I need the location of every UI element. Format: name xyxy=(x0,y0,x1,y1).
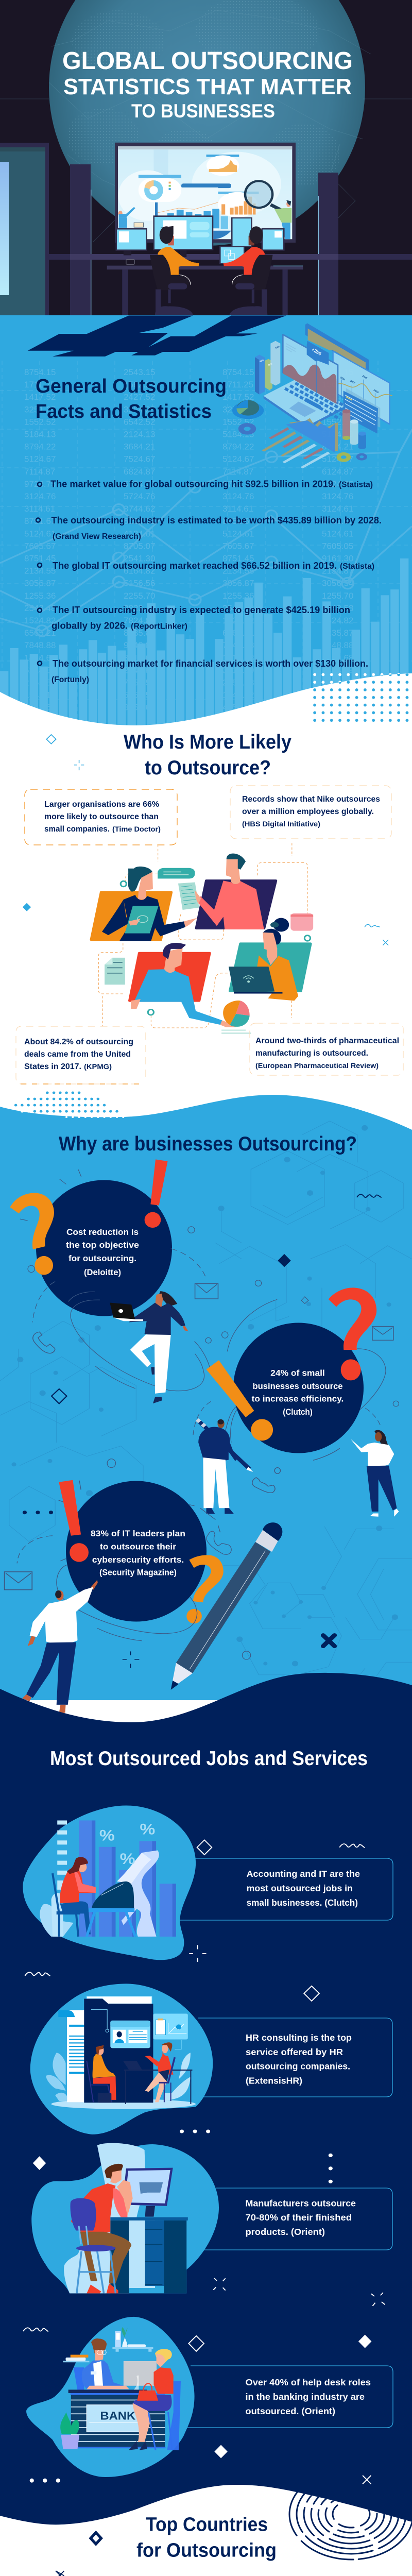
deco marks white section xyxy=(23,735,388,945)
grid numbers: 8751.67 xyxy=(24,516,56,526)
heading: why are businesses outsourcing: Why are businesses Outsourcing? xyxy=(59,1133,357,1155)
stat box: Nike: Records show that Nike outsources xyxy=(242,795,380,804)
grid numbers: 2155.58 xyxy=(24,678,56,687)
job card 2: HR xyxy=(30,1984,392,2183)
grid numbers: 8794.22 xyxy=(24,442,56,452)
grid numbers: 6824.87 xyxy=(124,467,155,477)
back panel xyxy=(305,323,369,372)
icon: giant pencil xyxy=(171,1522,282,1690)
illustration: accountant: % xyxy=(120,1850,135,1867)
heading: who is more likely: to Outsource? xyxy=(145,757,271,779)
wall screen with charts xyxy=(115,143,296,243)
timeline panel xyxy=(333,351,392,424)
hero section: control room xyxy=(0,0,412,315)
heading: top countries: Top Countries xyxy=(146,2514,268,2536)
why section blue background xyxy=(0,1095,412,1700)
callout box: Over 40% of help desk roles xyxy=(245,2377,371,2387)
grid numbers: 1524.52 xyxy=(322,392,353,402)
main title: STATISTICS THAT MATTER xyxy=(63,74,352,99)
grid numbers: 7605.05 xyxy=(322,541,353,551)
grid numbers: 1235.87 xyxy=(322,628,353,638)
illustration: accountant: % xyxy=(140,1820,155,1838)
grid numbers xyxy=(24,367,353,713)
job card 1: accounting xyxy=(23,1805,393,1976)
heading: top countries xyxy=(136,2514,277,2562)
bars: 56% xyxy=(259,359,264,363)
lines and small marks xyxy=(17,1459,251,1659)
grid numbers: 8751.67 xyxy=(222,516,254,526)
floor shadows of operators xyxy=(28,315,286,357)
fact: industry worth: The outsourcing industry is estimated to be worth $435.89 billion by 2028. xyxy=(52,515,382,526)
grid numbers: 7114.87 xyxy=(24,467,55,477)
grid numbers: 1255.36 xyxy=(24,591,56,601)
navy section background xyxy=(0,1673,412,2530)
callout box: outsourced. (Orient) xyxy=(245,2406,335,2416)
icon: orange question xyxy=(186,1555,224,1623)
stat circle 1: cost reduction: the top objective xyxy=(66,1240,139,1250)
connectors xyxy=(98,843,307,1028)
grid numbers: 5156.56 xyxy=(124,579,155,588)
illustration: bank desk xyxy=(26,2317,195,2477)
grid numbers: 5214.89 xyxy=(24,665,56,675)
man in coral xyxy=(195,854,264,929)
stat circle 1: cost reduction xyxy=(36,1180,172,1316)
stat box: larger organisations: more likely to outsource than xyxy=(44,812,159,821)
icon: cross xyxy=(323,1635,334,1646)
callout box xyxy=(203,2188,392,2250)
page icon xyxy=(105,958,125,985)
man reaching up xyxy=(22,1580,98,1713)
stat box: larger organisations: Larger organisations are 66% xyxy=(44,800,159,809)
grid numbers: 1542.12 xyxy=(24,690,56,700)
grid numbers: 3251.25 xyxy=(322,404,353,414)
icon: red question xyxy=(329,1287,376,1380)
grid numbers: 7855.55 xyxy=(124,678,155,687)
grid numbers: 7824.82 xyxy=(124,616,155,625)
grid numbers: 5124.61 xyxy=(322,529,353,538)
grid numbers: 2543.48 xyxy=(24,603,56,613)
icon: magnifier xyxy=(245,181,281,210)
pie chart xyxy=(223,1001,250,1027)
icon: envelope right xyxy=(372,1327,393,1340)
callout box: (ExtensisHR) xyxy=(246,2076,302,2086)
bars xyxy=(255,341,280,395)
stat circle 3: IT leaders xyxy=(66,1481,207,1622)
grid numbers: 6164.82 xyxy=(124,566,155,576)
grid numbers: 3124.76 xyxy=(322,492,353,501)
grid numbers: 5124.61 xyxy=(222,529,254,538)
stripe chart xyxy=(262,427,330,468)
grid numbers: 1248.88 xyxy=(322,640,353,650)
grid numbers: 3254.25 xyxy=(124,404,155,414)
stat box: Nike xyxy=(230,786,391,839)
cylinders xyxy=(342,409,366,449)
stat box: KPMG: deals came from the United xyxy=(24,1050,131,1059)
grid numbers: 2134.87 xyxy=(322,566,353,576)
lower canvas: countries and footer xyxy=(56,2571,65,2576)
grid numbers: 1417.52 xyxy=(24,392,56,402)
grid numbers: 3684.21 xyxy=(124,442,155,452)
woman looking up xyxy=(351,1430,399,1517)
stat box: pharma xyxy=(250,1023,403,1075)
grid numbers: 2155.58 xyxy=(222,678,254,687)
grid numbers: 5184.13 xyxy=(24,430,56,439)
white wave with dots xyxy=(0,673,412,732)
grid numbers: 2134.55 xyxy=(24,566,56,576)
main title: TO BUSINESSES xyxy=(131,100,275,122)
stat box: larger organisations: small companies. xyxy=(44,825,110,834)
grid numbers: 1542.12 xyxy=(322,690,353,700)
grid numbers: 2427.52 xyxy=(124,392,155,402)
grid numbers: 1417.52 xyxy=(222,392,254,402)
operator in red xyxy=(224,226,273,315)
stat circle 1: cost reduction: (Deloitte) xyxy=(84,1267,121,1277)
job card 4: banking xyxy=(26,2317,393,2484)
grid numbers: 4558.69 xyxy=(24,703,56,713)
callout box: small businesses. (Clutch) xyxy=(247,1897,358,1908)
grid numbers: 6124.61 xyxy=(124,516,155,526)
stat circle 1: cost reduction: for outsourcing. xyxy=(68,1253,136,1263)
grid numbers: 2155.58 xyxy=(322,678,353,687)
grid numbers: 1524.82 xyxy=(322,616,353,625)
man in blue xyxy=(131,943,236,1027)
grid numbers: 2543.48 xyxy=(222,603,254,613)
bars: 74% xyxy=(275,345,280,349)
callout box: Accounting and IT are the xyxy=(247,1869,360,1879)
teal rings xyxy=(121,881,311,1015)
grid numbers: 2255.70 xyxy=(124,591,155,601)
man with pencil xyxy=(197,1419,253,1514)
grid numbers: 5124.61 xyxy=(24,529,56,538)
icon: envelope xyxy=(5,1572,32,1590)
grid numbers: 1414.89 xyxy=(322,665,353,675)
desk and monitors xyxy=(107,215,303,315)
bar chart backdrop xyxy=(0,558,408,740)
grid numbers: 1562.25 xyxy=(124,380,155,389)
grid numbers: 7848.88 xyxy=(222,640,254,650)
grid numbers: 5124.67 xyxy=(222,454,254,464)
illustration: HR consultation xyxy=(30,1984,213,2134)
line chart backdrop xyxy=(0,430,412,636)
isometric laptop dashboard illustration xyxy=(232,323,392,468)
timeline panel: 2018 xyxy=(362,375,368,380)
grid numbers: 9724.75 xyxy=(222,479,254,489)
grid numbers: 7605.67 xyxy=(222,541,254,551)
fact: IT revenue: (ReportLinker) xyxy=(131,622,187,631)
decor xyxy=(23,2278,385,2331)
stat box: pharma: manufacturing is outsourced. xyxy=(255,1049,368,1058)
icon: envelope xyxy=(195,1283,218,1299)
decor around third circle xyxy=(5,1459,334,1713)
timeline panel: 2019 xyxy=(373,389,379,394)
chart window xyxy=(283,334,338,404)
grid numbers: 4558.69 xyxy=(322,703,353,713)
analyst figure in green xyxy=(274,200,291,239)
grid numbers: 7605.67 xyxy=(24,541,56,551)
shapes decor xyxy=(52,1194,382,1404)
grid numbers: 2541.30 xyxy=(124,553,155,564)
grid numbers: 8835.84 xyxy=(124,628,155,638)
grid numbers: 3056.87 xyxy=(24,579,56,588)
grid numbers: 2134.55 xyxy=(222,566,254,576)
grid numbers: 8744.62 xyxy=(124,504,155,514)
stat box: KPMG xyxy=(16,1026,146,1084)
grid numbers: 3251.25 xyxy=(222,404,254,414)
timeline panel: 2016 xyxy=(339,376,346,381)
grid numbers: 3124.76 xyxy=(24,492,56,501)
grid numbers: 2344.89 xyxy=(124,665,155,675)
grid numbers: 3124.76 xyxy=(222,492,254,501)
stat circle 2: small businesses: (Clutch) xyxy=(283,1407,313,1417)
gears xyxy=(238,423,367,462)
grid numbers: 8751.45 xyxy=(24,553,56,564)
fact: industry worth: (Grand View Research) xyxy=(53,532,141,541)
fact: financial services xyxy=(38,658,368,684)
grid numbers: 1255.36 xyxy=(222,591,254,601)
heading: who is more likely: Who Is More Likely xyxy=(124,731,291,753)
icon: orange exclamation xyxy=(207,1360,273,1440)
pillars and rail xyxy=(49,164,412,315)
tag +256: +256 xyxy=(311,347,322,357)
panel: orange xyxy=(91,892,171,940)
stat circle 3: IT leaders: to outsource their xyxy=(100,1542,176,1552)
panel: red xyxy=(130,953,210,1001)
woman with laptop figure xyxy=(110,1291,188,1403)
grid numbers: 1552.52 xyxy=(24,417,56,427)
small data window xyxy=(344,388,380,434)
grid numbers: 8751.67 xyxy=(322,516,353,526)
grid numbers: 2543.15 xyxy=(124,367,155,377)
operator in orange xyxy=(150,226,199,315)
stat circle 2: small businesses xyxy=(233,1323,364,1453)
grid numbers: 1552.52 xyxy=(322,417,353,427)
grid numbers: 8794.22 xyxy=(222,442,254,452)
stat box: KPMG: About 84.2% of outsourcing xyxy=(24,1038,133,1046)
grid numbers: 6542.52 xyxy=(124,417,155,427)
grid numbers: 4124.61 xyxy=(124,529,155,538)
grid numbers: 8794.21 xyxy=(322,442,353,452)
grid numbers: 1524.82 xyxy=(24,616,56,625)
grid numbers: 3251.25 xyxy=(24,404,56,414)
callout box: products. (Orient) xyxy=(245,2227,325,2237)
grid numbers: 3458.60 xyxy=(124,703,155,713)
heading: top countries: for Outsourcing xyxy=(136,2540,277,2562)
wall panel left xyxy=(0,143,49,315)
grid numbers: 1542.12 xyxy=(222,690,254,700)
main title xyxy=(62,47,353,122)
grid numbers: 1562.25 xyxy=(322,380,353,389)
grid numbers: 5124.67 xyxy=(24,454,56,464)
grid numbers: 1524.82 xyxy=(222,616,254,625)
grid numbers: 6565.21 xyxy=(222,628,254,638)
grid numbers: 8705.07 xyxy=(124,541,155,551)
fact: financial services: The outsourcing market for financial services is worth over $130 billion. xyxy=(53,658,368,669)
grid numbers: 6565.21 xyxy=(24,628,56,638)
grid numbers: 1414.68 xyxy=(222,653,254,663)
heading: general outsourcing: General Outsourcing xyxy=(36,376,227,397)
illustration: designer at desk xyxy=(31,2143,219,2293)
stat box: Nike: (HBS Digital Initiative) xyxy=(242,820,320,828)
decor xyxy=(33,1986,333,2183)
laptop base xyxy=(264,379,347,429)
grid numbers: 4558.69 xyxy=(222,703,254,713)
fact: IT revenue: The IT outsourcing industry is expected to generate $425.19 billion xyxy=(53,604,350,615)
chat bubble xyxy=(158,868,195,878)
icon: fingerprint top right xyxy=(288,2492,412,2561)
grid numbers: 9724.75 xyxy=(322,479,353,489)
stat box: KPMG: (KPMG) xyxy=(84,1062,112,1071)
grid numbers: 9161.30 xyxy=(322,553,353,564)
heading: most outsourced: Most Outsourced Jobs and Services xyxy=(50,1748,368,1770)
panel: teal xyxy=(230,944,311,991)
analyst figure in blue xyxy=(118,207,144,228)
decor xyxy=(30,2335,371,2484)
stat box: Nike: over a million employees globally. xyxy=(242,807,374,816)
fact: global IT market: (Statista) xyxy=(340,562,374,571)
stat circle 3: IT leaders: cybersecurity efforts. xyxy=(92,1555,184,1565)
grid numbers: 5184.13 xyxy=(222,430,254,439)
grid numbers: 8751.45 xyxy=(222,553,254,564)
deco marks xyxy=(56,2533,101,2576)
callout box: service offered by HR xyxy=(246,2047,343,2057)
stat circle 2: small businesses: 24% of small xyxy=(270,1368,325,1378)
fact: financial services: (Fortunly) xyxy=(52,675,89,684)
fact: IT revenue: globally by 2026. xyxy=(52,620,128,631)
stat box: KPMG: States in 2017. xyxy=(24,1062,81,1071)
decor around first circle xyxy=(10,1159,399,1443)
bars: 31% xyxy=(267,362,272,367)
callout box xyxy=(185,2366,393,2428)
grid numbers: 7114.87 xyxy=(222,467,253,477)
grid numbers: 8754.15 xyxy=(222,367,254,377)
job card 3: manufacturers xyxy=(23,2143,392,2331)
grid numbers: 1414.68 xyxy=(322,653,353,663)
illustration: accountant: % xyxy=(99,1826,115,1844)
grid numbers: 3514.65 xyxy=(124,653,155,663)
grid numbers: 9724.75 xyxy=(24,479,56,489)
callout box: Manufacturers outsource xyxy=(245,2198,356,2209)
dot cluster xyxy=(14,1092,124,1118)
callout box: 70-80% of their finished xyxy=(245,2212,352,2223)
fact: IT revenue xyxy=(38,604,350,631)
grid numbers: 1711.25 xyxy=(222,380,253,389)
blue stats section background xyxy=(0,315,412,740)
deco marks lower xyxy=(56,2571,412,2576)
stat box: pharma: Around two-thirds of pharmaceutical xyxy=(255,1037,399,1045)
stat circle 3: IT leaders: 83% of IT leaders plan xyxy=(91,1529,185,1538)
callout box xyxy=(198,2018,392,2097)
decor xyxy=(25,1840,365,1976)
stat box: larger organisations xyxy=(25,789,177,845)
timeline panel: 2017 xyxy=(350,380,356,384)
triangle chart xyxy=(286,418,338,452)
hexagon network backdrop xyxy=(0,1121,412,1443)
stat box: larger organisations: (Time Doctor) xyxy=(112,825,161,833)
grid numbers: 6124.87 xyxy=(322,467,353,477)
figures beneath second circle xyxy=(197,1419,399,1517)
callout box: HR consulting is the top xyxy=(246,2032,352,2043)
illustration: accountant xyxy=(23,1805,196,1960)
callout box: most outsourced jobs in xyxy=(247,1883,353,1893)
telephone and marks xyxy=(252,1448,340,1493)
document held xyxy=(178,882,199,910)
grid numbers: 7848.88 xyxy=(24,640,56,650)
grid numbers: 3056.87 xyxy=(222,579,254,588)
stat circle 2: small businesses: to increase efficiency. xyxy=(252,1394,344,1403)
grid numbers: 3214.89 xyxy=(222,665,254,675)
white wave for countries section xyxy=(0,2485,412,2576)
fact: market value: The market value for global outsourcing hit $92.5 billion in 2019. xyxy=(50,478,336,489)
grid numbers: 5184.13 xyxy=(322,430,353,439)
main title: GLOBAL OUTSOURCING xyxy=(62,47,353,75)
grid numbers: 7524.67 xyxy=(124,454,155,464)
icon: red exclamation xyxy=(145,1159,168,1228)
grid numbers: 1711.25 xyxy=(24,380,55,389)
grid numbers: 8754.15 xyxy=(24,367,56,377)
grid numbers: 2823.48 xyxy=(124,603,155,613)
icon: orange question xyxy=(10,1193,54,1275)
callout box: in the banking industry are xyxy=(245,2392,365,2402)
panel: navy xyxy=(196,880,276,928)
grid numbers: 1414.68 xyxy=(24,653,56,663)
grid numbers: 5724.76 xyxy=(124,492,155,501)
heading: general outsourcing xyxy=(36,376,227,422)
grid numbers: 1552.52 xyxy=(222,417,254,427)
callout box: outsourcing companies. xyxy=(246,2061,350,2071)
grid numbers: 9448.88 xyxy=(124,640,155,650)
globe xyxy=(0,0,412,246)
stat box: pharma: (European Pharmaceutical Review) xyxy=(255,1061,379,1070)
icon: telephone xyxy=(33,1332,55,1353)
grid numbers: 1255.70 xyxy=(322,591,353,601)
grid numbers: 3124.61 xyxy=(322,504,353,514)
grid numbers: 3114.61 xyxy=(222,504,253,514)
grid numbers: 3056.54 xyxy=(322,579,353,588)
woman with laptop xyxy=(229,918,298,1001)
stat circle 2: small businesses: businesses outsource xyxy=(252,1381,343,1391)
orbit lines xyxy=(20,1170,399,1443)
people collaborating illustration xyxy=(91,854,313,1033)
grid numbers: 1234.15 xyxy=(322,367,353,377)
pie xyxy=(232,400,264,419)
grid numbers: 5452.54 xyxy=(124,690,155,700)
tag +256 xyxy=(307,341,329,365)
fact: global IT market: The global IT outsourcing market reached $66.52 billion in 2019. xyxy=(53,560,337,571)
grid numbers: 3114.61 xyxy=(24,504,55,514)
facts list xyxy=(36,478,382,684)
heading: who is more likely xyxy=(124,731,291,779)
grid numbers: 2124.13 xyxy=(124,430,155,439)
grid numbers: 5724.75 xyxy=(124,479,155,489)
illustration: bank desk: BANK xyxy=(100,2410,136,2422)
fact: market value: (Statista) xyxy=(339,480,373,489)
icon: red exclamation xyxy=(59,1480,89,1562)
folder xyxy=(290,913,313,931)
callout box xyxy=(180,1858,393,1920)
stat circle 3: IT leaders: (Security Magazine) xyxy=(99,1568,177,1578)
grid numbers: 5124.67 xyxy=(322,454,353,464)
heading: general outsourcing: Facts and Statistics xyxy=(36,401,212,422)
decor around second circle xyxy=(207,1287,376,1440)
fact: industry worth xyxy=(36,515,382,541)
woman with tablet xyxy=(102,867,197,941)
grid numbers: 2543.58 xyxy=(322,603,353,613)
stat circle 1: cost reduction: Cost reduction is xyxy=(66,1227,139,1237)
